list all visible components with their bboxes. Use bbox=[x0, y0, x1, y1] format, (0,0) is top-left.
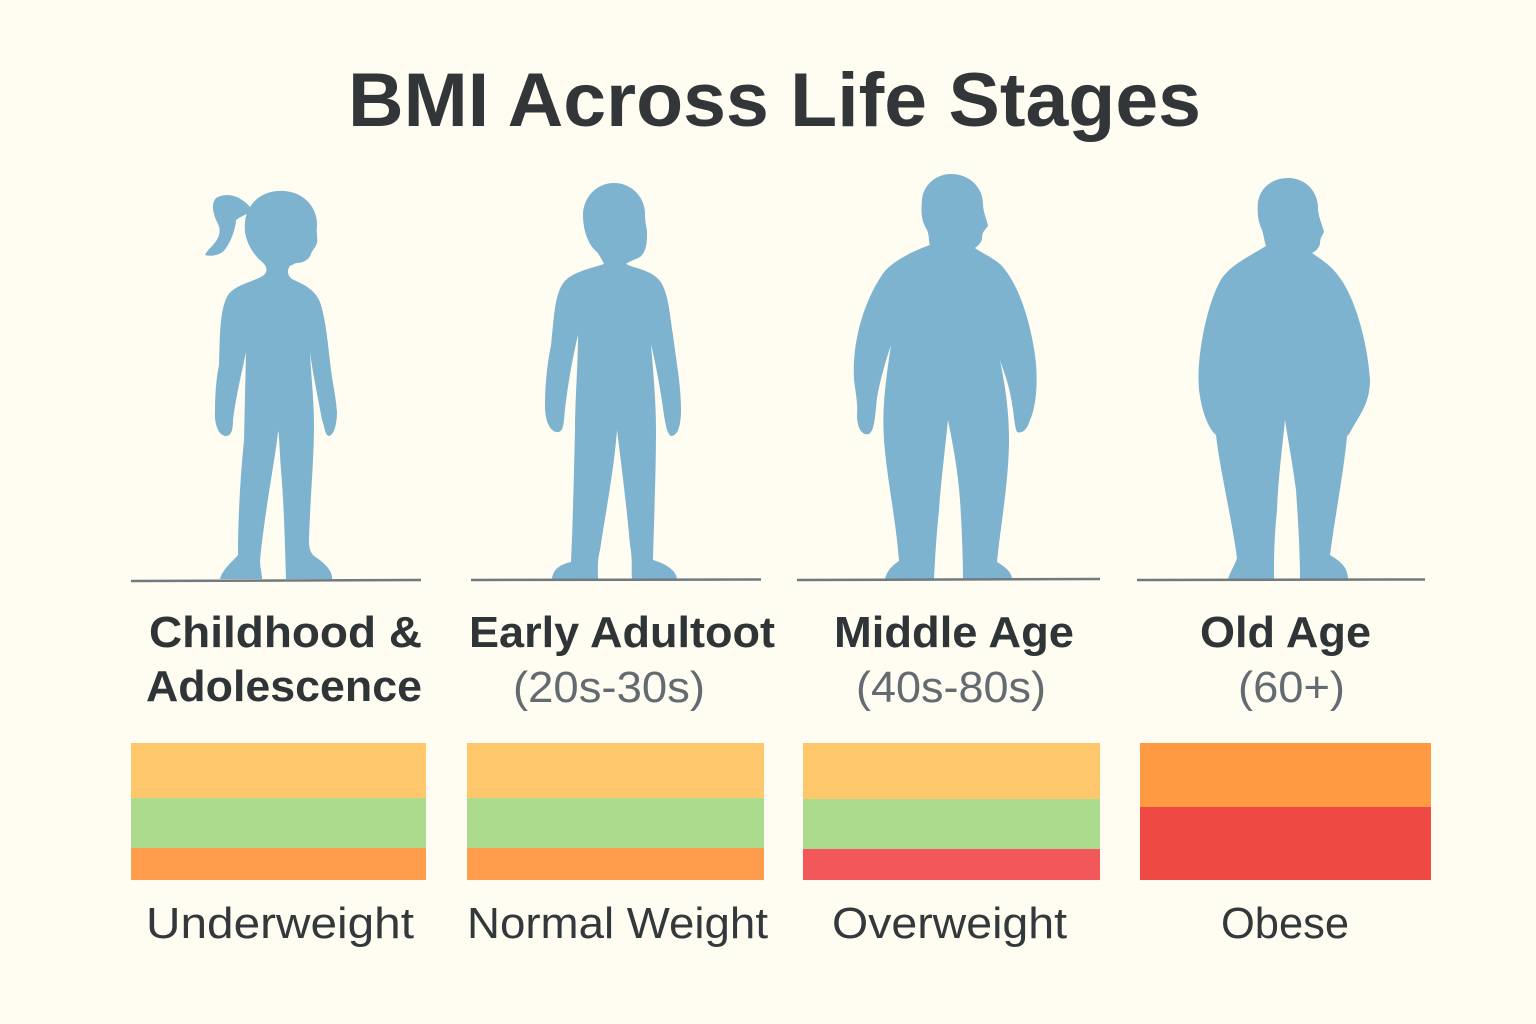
label: old age bbox=[1200, 608, 1371, 712]
title: BMI Across Life Stages bbox=[348, 58, 1201, 143]
BMI bar: early adulthood bbox=[467, 743, 764, 880]
label: middle age: (40s-80s) bbox=[856, 663, 1046, 712]
category: obese: Obese bbox=[1221, 899, 1349, 948]
label: early adulthood: (20s-30s) bbox=[513, 663, 705, 712]
category: normal weight: Normal Weight bbox=[467, 899, 768, 948]
label: middle age: Middle Age bbox=[834, 608, 1074, 657]
figure: old age silhouette bbox=[1199, 178, 1370, 579]
BMI bar: middle age bbox=[803, 743, 1100, 880]
label: old age: Old Age bbox=[1200, 608, 1371, 657]
BMI bar: childhood bbox=[131, 743, 426, 880]
label: childhood: Childhood & bbox=[149, 608, 422, 657]
label: childhood bbox=[146, 608, 422, 711]
ground lines bbox=[131, 579, 1425, 581]
label: middle age bbox=[834, 608, 1074, 712]
label: early adulthood: Early Adultoot bbox=[469, 608, 775, 657]
figure: early adulthood silhouette bbox=[545, 183, 681, 579]
category: underweight: Underweight bbox=[146, 899, 414, 948]
label: early adulthood bbox=[469, 608, 775, 712]
category: overweight: Overweight bbox=[832, 899, 1067, 948]
figure: childhood silhouette bbox=[205, 191, 337, 579]
figure: middle age silhouette bbox=[854, 174, 1037, 579]
BMI bar: old age bbox=[1140, 743, 1431, 880]
label: childhood: Adolescence bbox=[146, 662, 422, 711]
label: old age: (60+) bbox=[1238, 663, 1345, 712]
